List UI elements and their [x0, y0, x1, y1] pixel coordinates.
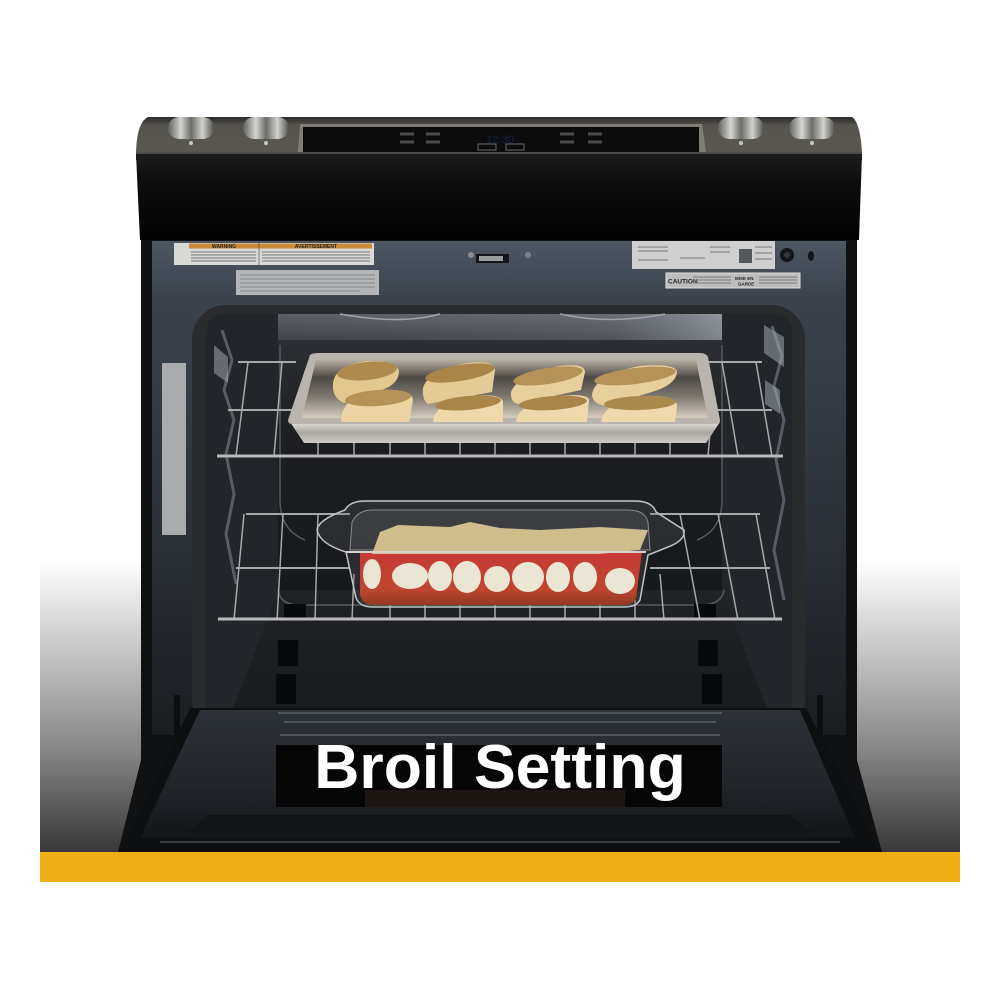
caution label: CAUTION [668, 278, 698, 286]
upper tray rack [217, 362, 783, 456]
caution label: GARDE [738, 282, 754, 286]
door lower recess [188, 815, 812, 833]
warning label [174, 243, 374, 265]
bread slice 2 [341, 388, 413, 422]
cavity front panel [152, 241, 846, 735]
cheese topping [372, 522, 648, 554]
bread slice 1 [333, 359, 399, 403]
side sticker [162, 363, 186, 535]
oven range [118, 117, 882, 852]
background gradient panel [40, 560, 960, 852]
cavity top lit band [210, 314, 786, 340]
title: Broil Setting [314, 732, 686, 802]
floor vents [276, 604, 722, 704]
sauce [360, 552, 642, 605]
vents [780, 248, 814, 262]
door window [276, 745, 722, 807]
sticker: safety text [236, 270, 379, 295]
cavity side wall right [722, 314, 792, 712]
side wall highlights [222, 326, 784, 600]
display digits: 12:30 [486, 134, 514, 146]
knob right 2 [789, 117, 835, 145]
baking tray [288, 353, 720, 443]
oven cavity interior [206, 314, 792, 734]
bread slice 4 [433, 393, 503, 422]
door top ridges [278, 713, 722, 735]
knob right 1 [718, 117, 764, 145]
dish rim [346, 551, 646, 553]
bread slice 3 [423, 360, 496, 404]
oven door glass and inner door [120, 708, 880, 852]
data plate [632, 241, 775, 269]
tray rim [288, 353, 720, 424]
dish inner glass rim [350, 510, 650, 550]
yellow footer bar [40, 852, 960, 882]
knob left 2 [243, 117, 289, 145]
tray inner surface [302, 360, 708, 418]
knob left 1 [168, 117, 214, 145]
oven body sides [118, 238, 882, 852]
bread slice 7 [592, 363, 677, 406]
warning label: WARNING [212, 244, 236, 250]
bread slice 5 [511, 363, 585, 404]
door window reflection [365, 790, 625, 807]
cavity side wall left [206, 314, 278, 712]
bread slice 6 [516, 394, 589, 422]
dish glass body [317, 501, 684, 607]
caution label: MISE EN [735, 276, 754, 281]
filled pasta rolls [363, 559, 635, 594]
tray front wall [290, 422, 720, 443]
lower dish rack [218, 514, 782, 620]
cavity floor [232, 590, 768, 712]
glass baking dish [317, 501, 684, 607]
warning label: AVERTISSEMENT [295, 244, 337, 250]
bread slice 8 [601, 395, 677, 422]
garlic bread slices [333, 359, 677, 422]
door gasket [192, 305, 805, 735]
inner back frame [278, 345, 724, 605]
control display glass [298, 124, 706, 152]
caution label [666, 273, 800, 288]
door hinges [174, 695, 823, 735]
door latch [468, 252, 531, 263]
cooktop control panel [136, 117, 862, 160]
cavity back wall [278, 314, 722, 590]
black fascia [136, 154, 862, 240]
